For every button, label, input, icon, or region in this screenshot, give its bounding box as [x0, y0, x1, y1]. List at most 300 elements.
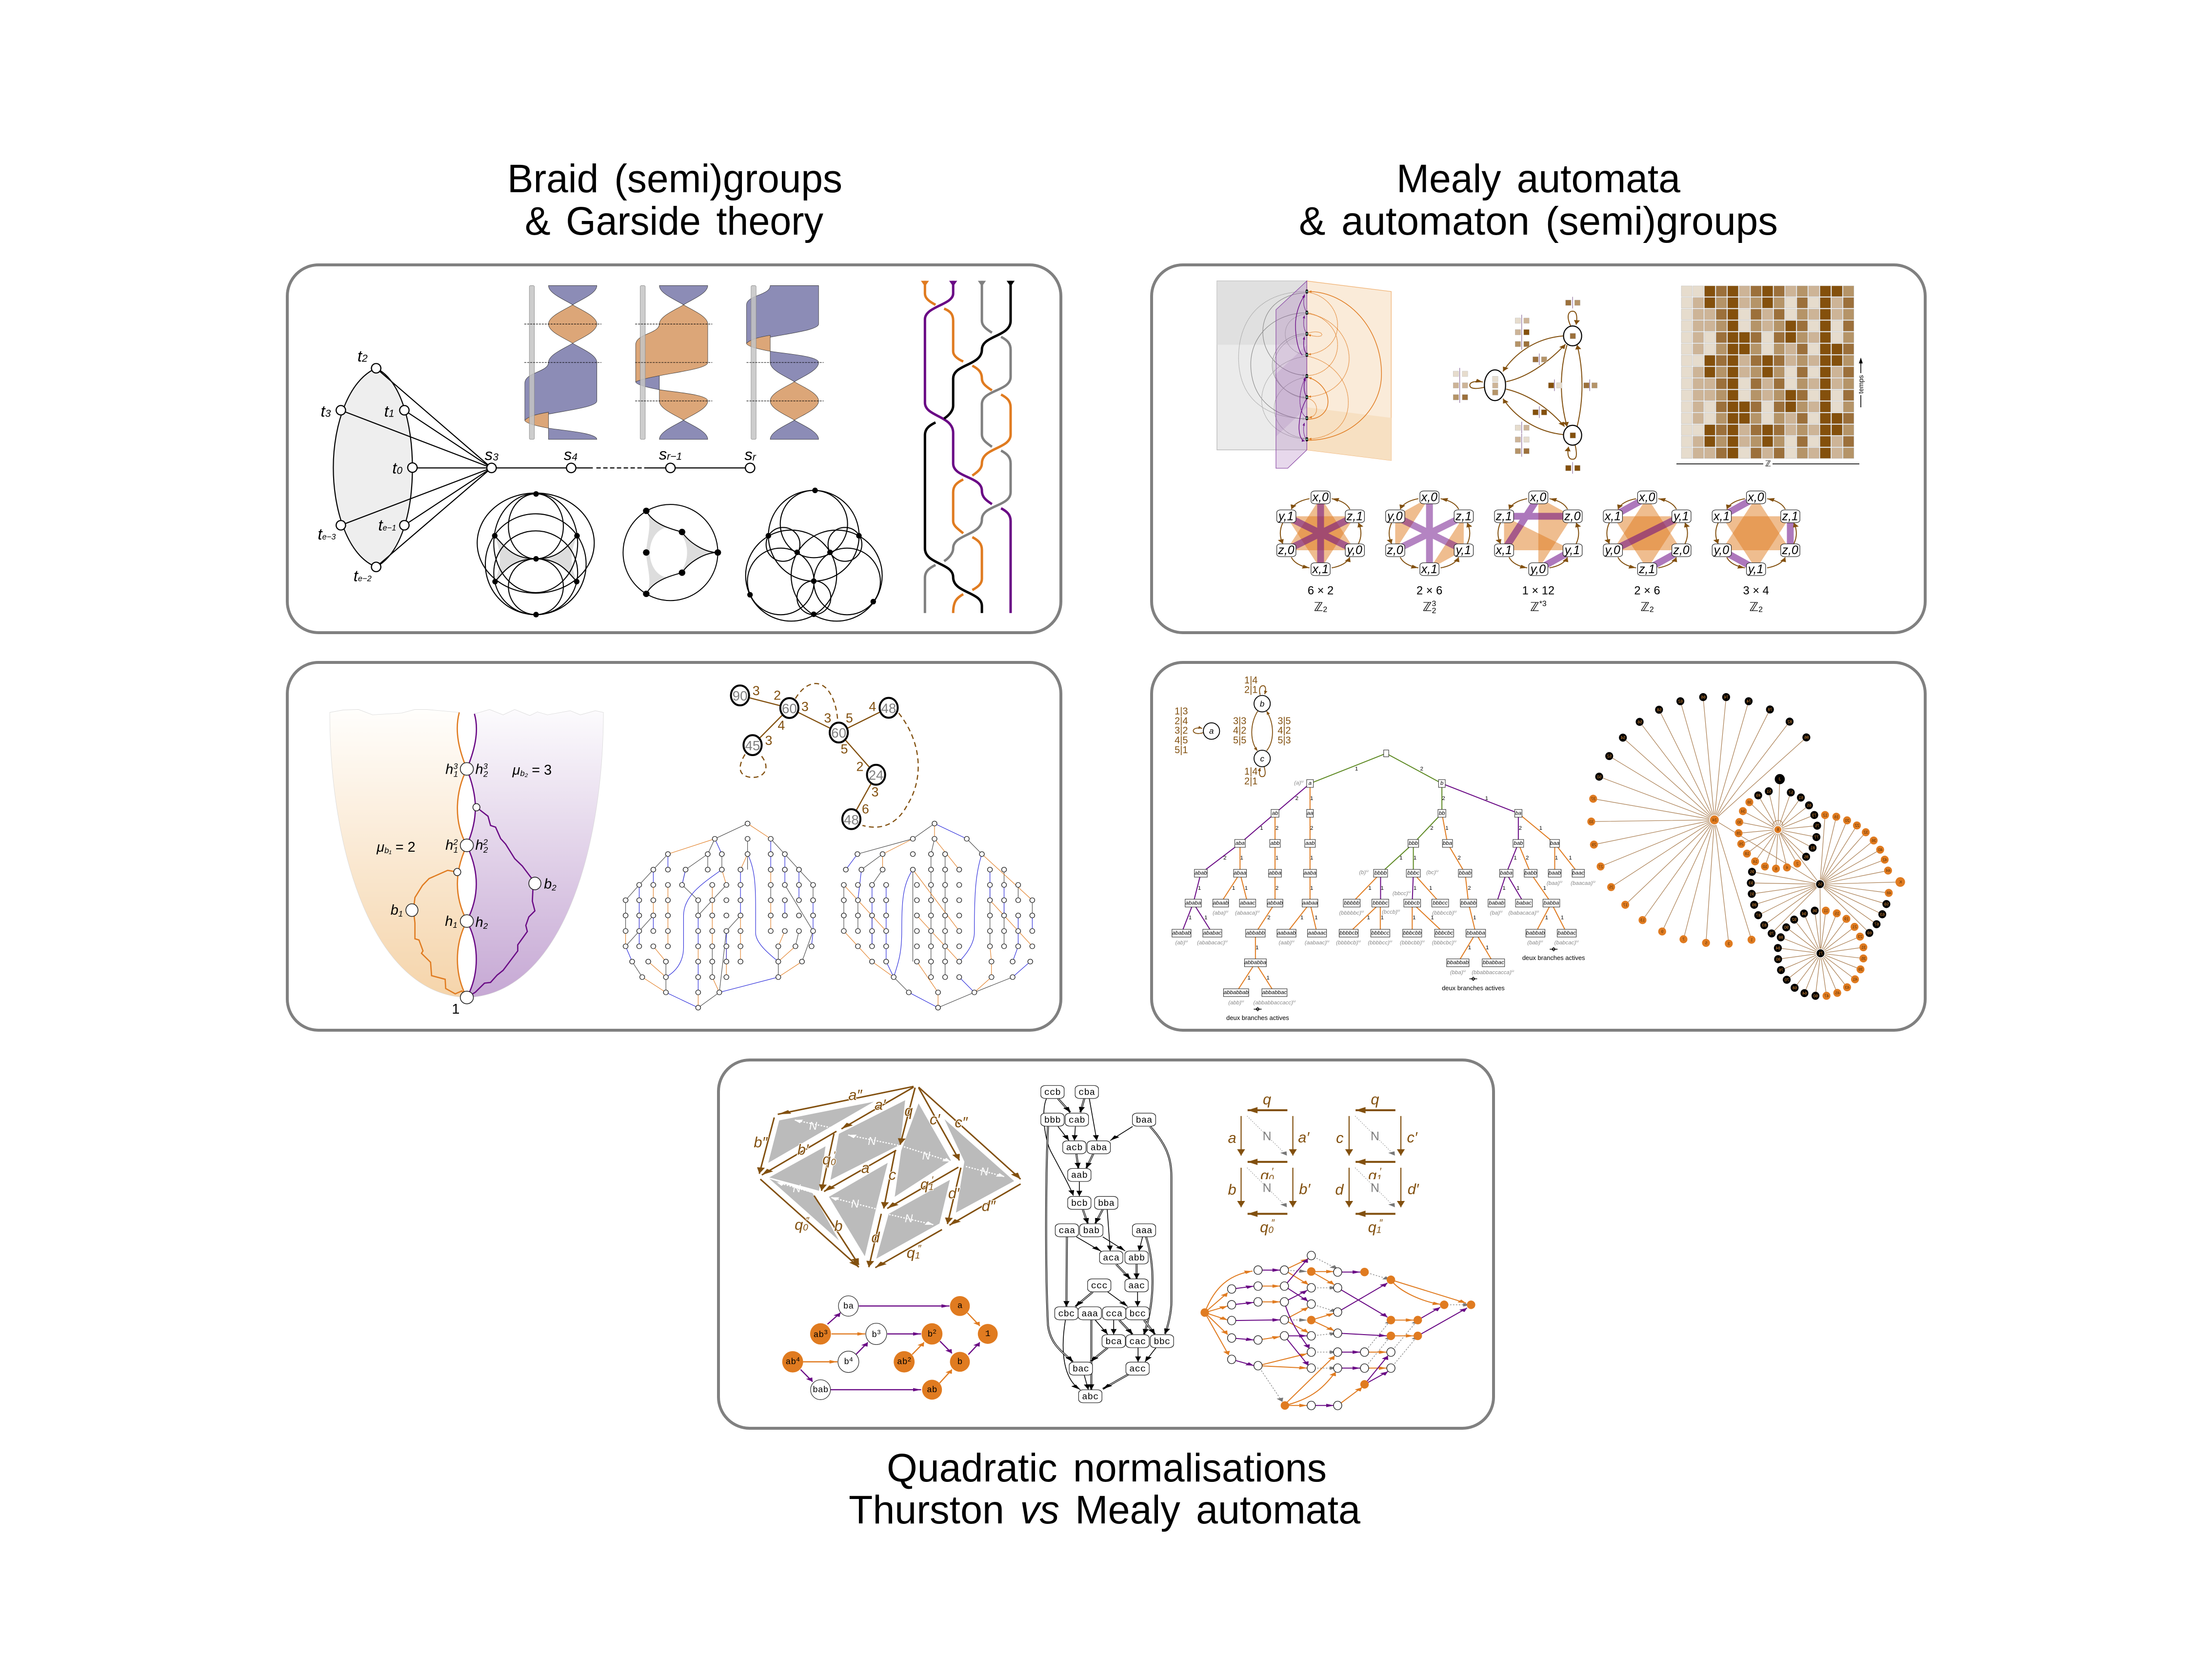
word tree: ω	[1185, 939, 1188, 943]
star graph orbits: 47	[1824, 993, 1829, 998]
word tree: (bbabbaccacca)	[1472, 970, 1512, 976]
shaded parabola with paths: h	[445, 838, 453, 853]
graph of powers of ab: 4	[796, 1356, 800, 1363]
star graph orbits	[1589, 695, 1905, 998]
shaded parabola with paths: 2	[482, 838, 488, 847]
word tree: (bbbbcb)	[1336, 940, 1358, 946]
word graph with rounded nodes	[1044, 1087, 1172, 1402]
hexagonal graph 2: ℤ	[1423, 600, 1432, 614]
word tree: (babacaca)	[1508, 910, 1536, 916]
word tree: deux branches actives	[1442, 984, 1505, 992]
commutative squares: ′	[1379, 1166, 1382, 1177]
domino tiling diagram: d′	[948, 1185, 960, 1202]
hexagonal graph 2: y,0	[1386, 509, 1403, 523]
Coxeter graph with labelled nodes: s	[659, 445, 667, 463]
word tree: ω	[1293, 999, 1296, 1003]
word tree: ababac	[1203, 930, 1222, 936]
word tree: baba	[1500, 870, 1513, 876]
graph of powers of ab: 2	[933, 1328, 937, 1336]
word tree: 1	[1381, 915, 1384, 921]
word tree: abaab	[1213, 900, 1229, 906]
hexagonal graph 4	[1603, 491, 1691, 614]
star graph orbits: 36	[1872, 838, 1876, 843]
word tree: ω	[1257, 910, 1260, 913]
word graph with rounded nodes: cbc	[1058, 1308, 1075, 1319]
word tree: 1	[1310, 885, 1313, 891]
word tree: 1	[1267, 975, 1270, 981]
star graph orbits: 44	[1886, 868, 1891, 873]
title: Mealy automata: Mealy automata	[1396, 157, 1680, 201]
word tree: 1	[1367, 915, 1370, 921]
word tree: babb	[1524, 870, 1537, 876]
word graph with rounded nodes: baa	[1136, 1115, 1152, 1125]
word tree: (bc)	[1426, 870, 1436, 876]
Coxeter graph with labelled nodes: t	[320, 402, 325, 420]
commutative squares: ″	[1379, 1218, 1383, 1229]
shaded parabola with paths: b₂	[520, 768, 528, 778]
word tree: 2	[1295, 796, 1298, 801]
word tree: bbbbcb	[1339, 930, 1358, 936]
tree graph with degree labels: 3	[753, 683, 760, 698]
commutative squares: N	[1371, 1182, 1379, 1195]
star graph orbits: 91	[1750, 891, 1754, 897]
word tree: 1	[1561, 915, 1564, 921]
Coxeter graph with labelled nodes: e−2	[358, 575, 372, 583]
graph of powers of ab: 3	[877, 1329, 881, 1336]
star graph orbits: 83	[1762, 923, 1767, 928]
hexagonal graph 4: y,0	[1604, 543, 1620, 557]
word tree: 1	[1368, 885, 1372, 891]
small automaton a b c: 2|1	[1244, 776, 1257, 787]
commutative squares: q	[1260, 1167, 1269, 1184]
star graph orbits: 49	[1756, 793, 1761, 798]
star graph orbits: 70	[1784, 978, 1789, 982]
graph of powers of ab: b	[957, 1358, 962, 1367]
word graph with rounded nodes: bcc	[1129, 1308, 1146, 1319]
word tree: 2	[1468, 885, 1471, 891]
star graph orbits: 54	[1621, 735, 1625, 740]
tree graph with degree labels: 48	[844, 812, 859, 827]
star graph orbits: 96	[1813, 908, 1817, 913]
word tree: ω	[1225, 939, 1228, 943]
hexagonal graph 4: y,1	[1673, 509, 1689, 523]
word tree: bab	[1514, 840, 1523, 846]
shaded parabola with paths: b₁	[384, 845, 392, 855]
lattice graph right	[844, 823, 1032, 1008]
hexagonal graph 2: x,0	[1421, 491, 1437, 504]
Coxeter graph with labelled nodes: s	[744, 445, 753, 463]
graph of powers of ab: ab	[897, 1358, 908, 1367]
word tree: bb	[1439, 810, 1445, 816]
star graph orbits: 82	[1787, 719, 1792, 724]
word tree: ω	[1327, 939, 1330, 943]
word tree: 2	[1275, 825, 1278, 831]
graph of powers of ab: 1	[985, 1329, 990, 1339]
word tree: 2	[1442, 796, 1445, 801]
hexagonal graph 5: 3 × 4	[1743, 584, 1769, 597]
star graph orbits: 62	[1678, 699, 1683, 704]
shaded parabola with paths: h	[475, 761, 483, 777]
domino tiling diagram: q	[907, 1244, 915, 1261]
word tree: baa	[1550, 840, 1559, 846]
word tree: (bbbcbb)	[1400, 940, 1422, 946]
star graph orbits: 95	[1750, 869, 1754, 874]
star graph orbits: 40	[1878, 847, 1883, 852]
word graph with rounded nodes: ccc	[1091, 1280, 1108, 1291]
layered graph with orange and purple arrows	[1205, 1256, 1471, 1405]
commutative squares	[1228, 1091, 1419, 1236]
star graph orbits: 34	[1741, 809, 1745, 814]
hexagonal graph 3: y,1	[1564, 543, 1580, 557]
word tree: a	[1309, 780, 1312, 786]
small automaton a b c: 1|4	[1244, 675, 1257, 686]
panel: parabola, tree and lattices	[287, 662, 1061, 1030]
commutative squares: a	[1228, 1129, 1236, 1146]
hexagonal graph 1: z,1	[1346, 509, 1363, 523]
hexagonal graph 4: z,1	[1638, 562, 1655, 576]
domino tiling diagram: d″	[982, 1197, 996, 1214]
graph of powers of ab: 4	[849, 1356, 853, 1363]
commutative squares: 0	[1268, 1225, 1274, 1235]
word graph with rounded nodes: ccb	[1044, 1087, 1061, 1098]
word tree: bbb	[1409, 840, 1418, 846]
word tree: 1	[1539, 825, 1542, 831]
star graph orbits: 39	[1858, 967, 1863, 972]
hexagonal graph 4: ℤ	[1640, 600, 1650, 614]
star graph orbits: 84	[1775, 945, 1780, 950]
word tree: aba	[1236, 840, 1245, 846]
word tree: ω	[1576, 939, 1579, 943]
commutative squares: N	[1371, 1130, 1379, 1143]
Coxeter graph with labelled nodes: t	[358, 347, 362, 365]
star graph orbits: 75	[1815, 823, 1819, 828]
title: braid semigroups: Braid (semi)groups	[507, 157, 842, 201]
circle diagram 1	[477, 493, 594, 615]
word tree: (aabaac)	[1305, 940, 1327, 946]
word tree: 1	[1189, 915, 1192, 921]
word tree: bbab	[1459, 870, 1472, 876]
hexagonal graph 1: y,1	[1277, 509, 1294, 523]
word tree: deux branches actives	[1522, 954, 1585, 961]
word tree: abbabb	[1246, 930, 1265, 936]
word tree: abbab	[1267, 900, 1283, 906]
hexagonal graph 5	[1712, 491, 1800, 614]
shaded parabola with paths: 1	[453, 920, 458, 930]
small automaton a b c: 5|3	[1277, 735, 1291, 746]
star graph orbits: 79	[1770, 931, 1774, 936]
word tree: ω	[1454, 910, 1457, 913]
star graph orbits: 52	[1607, 754, 1612, 759]
word tree: aab	[1305, 840, 1315, 846]
star graph orbits: 45	[1835, 990, 1840, 995]
word tree: ω	[1422, 939, 1425, 943]
hexagonal graph 2: z,0	[1386, 543, 1403, 557]
word tree: 2	[1420, 766, 1423, 772]
word tree: (babcac)	[1554, 940, 1576, 946]
word tree: ω	[1593, 880, 1595, 883]
commutative squares: b′	[1299, 1180, 1311, 1198]
tree graph with degree labels: 5	[841, 742, 848, 757]
domino tiling diagram	[754, 1086, 1020, 1268]
word tree: ab	[1272, 810, 1278, 816]
word tree: aaba	[1304, 870, 1316, 876]
commutative squares: 0	[1269, 1173, 1274, 1183]
word tree: 2	[1223, 855, 1226, 861]
word graph with rounded nodes: bba	[1098, 1198, 1115, 1209]
hexagonal graph 2	[1386, 491, 1474, 615]
word tree: ω	[1560, 880, 1563, 883]
star graph orbits: 7	[1682, 937, 1685, 942]
star graph orbits: 61	[1798, 795, 1803, 800]
word graph with rounded nodes: aba	[1091, 1142, 1107, 1153]
Coxeter graph with labelled nodes: t	[378, 516, 383, 534]
graph of powers of ab: b	[844, 1358, 849, 1367]
word tree: 1	[1545, 915, 1548, 921]
word tree: 2	[1267, 915, 1271, 921]
title: braid semigroups: & Garside theory	[525, 199, 823, 243]
shaded parabola with paths: b	[544, 877, 552, 892]
domino tiling diagram: a″	[848, 1086, 862, 1103]
graph of powers of ab: ab	[786, 1358, 796, 1367]
tree graph with degree labels: 3	[765, 733, 772, 748]
shaded parabola with paths: h	[475, 838, 483, 853]
star graph orbits: 76	[1779, 968, 1783, 973]
word tree: 1	[1486, 945, 1489, 951]
star graph orbits: 37	[1591, 796, 1595, 801]
panel: Mealy automata	[1152, 265, 1925, 633]
word tree: 1	[1315, 915, 1318, 921]
word graph with rounded nodes: cac	[1129, 1336, 1146, 1347]
tree graph with degree labels: 24	[869, 768, 884, 783]
panel: tree of words and orbit stars	[1152, 662, 1925, 1030]
shaded parabola with paths: = 3	[528, 762, 552, 778]
graph of powers of ab: b	[928, 1330, 933, 1339]
hexagonal graph 2: y,1	[1455, 543, 1471, 557]
lattice graph left	[626, 823, 813, 1008]
shaded parabola with paths: 1	[399, 909, 403, 918]
hexagonal graph 3: 1 × 12	[1522, 584, 1554, 597]
small automaton a b c: c	[1260, 754, 1264, 763]
star graph orbits: 48	[1887, 890, 1891, 896]
small automaton a b c: 1|4	[1244, 766, 1257, 777]
shaded parabola with paths: = 2	[392, 839, 416, 855]
domino tiling diagram: N	[868, 1135, 876, 1147]
word tree: (bbbbbc)	[1339, 910, 1361, 916]
star graph orbits: 59	[1884, 901, 1889, 906]
hexagonal graph 3: x,0	[1530, 491, 1546, 504]
shaded parabola with paths: h	[445, 761, 453, 777]
star graph orbits: 13	[1640, 918, 1645, 922]
word tree: b	[1440, 780, 1444, 786]
word tree: 1	[1232, 885, 1235, 891]
shaded parabola with paths: h	[476, 915, 483, 930]
Coxeter graph with labelled nodes: r	[753, 451, 757, 462]
graph of powers of ab: ab	[814, 1330, 824, 1340]
word tree: ω	[1241, 999, 1244, 1003]
hexagonal graph 3: *3	[1539, 600, 1547, 608]
star graph orbits: 63	[1880, 912, 1885, 917]
domino tiling diagram: b″	[754, 1134, 768, 1151]
graph of powers of ab: 2	[908, 1356, 911, 1363]
small automaton a b c: 3|2	[1175, 725, 1188, 736]
automaton with square labels	[1453, 297, 1597, 474]
word tree: 1	[1355, 766, 1358, 772]
word tree	[1172, 750, 1595, 1021]
star graph orbits: 32	[1864, 830, 1868, 835]
star graph orbits: 2	[1796, 861, 1798, 866]
word tree: 1	[1414, 855, 1416, 861]
star graph orbits: 11	[1824, 908, 1828, 913]
word tree: ω	[1226, 910, 1229, 913]
word tree: ababa	[1186, 900, 1201, 906]
commutative squares: d	[1335, 1181, 1344, 1198]
word tree: bbbcc	[1433, 900, 1448, 906]
star graph orbits: 31	[1861, 945, 1866, 950]
shaded parabola with paths: 3	[483, 761, 488, 771]
word tree: bbbcb	[1405, 900, 1420, 906]
small automaton a b c: 4|2	[1233, 725, 1246, 736]
star graph orbits: 41	[1853, 977, 1857, 982]
star graph orbits: 87	[1756, 913, 1761, 918]
domino tiling diagram: N	[851, 1197, 859, 1210]
shaded parabola with paths: μ	[513, 762, 520, 778]
word tree: babbac	[1557, 930, 1576, 936]
word tree: bba	[1443, 840, 1452, 846]
word tree: ω	[1397, 909, 1400, 912]
tree graph with degree labels: 2	[857, 759, 863, 774]
word tree: ω	[1463, 969, 1466, 973]
word tree: 2	[1519, 825, 1522, 831]
small automaton a b c: 5|5	[1233, 735, 1246, 746]
word tree: aa	[1307, 810, 1313, 816]
word tree: ω	[1436, 869, 1439, 873]
word tree: 1	[1310, 796, 1313, 801]
word tree: ω	[1536, 910, 1539, 913]
star graph orbits: 30	[1737, 820, 1742, 824]
tree graph with degree labels: 4	[777, 718, 785, 733]
word tree: 1	[1555, 855, 1558, 861]
star graph orbits: 89	[1752, 902, 1756, 907]
star graph orbits: 42	[1882, 857, 1887, 862]
word tree: 1	[1413, 915, 1416, 921]
word tree: babbab	[1526, 930, 1545, 936]
hexagonal graph 5: y,0	[1713, 543, 1729, 557]
word tree: 1	[1381, 885, 1384, 891]
word tree: bbbc	[1407, 870, 1419, 876]
commutative squares: N	[1263, 1182, 1272, 1195]
tree graph with degree labels: 4	[869, 699, 876, 714]
word tree: 1	[1255, 945, 1258, 951]
Coxeter graph with labelled nodes: t	[354, 566, 358, 584]
hexagonal graph 3: y,0	[1530, 562, 1546, 576]
word tree: abaac	[1240, 900, 1255, 906]
ribbon diagrams	[524, 285, 824, 440]
word tree: aabaa	[1302, 900, 1318, 906]
heat map axes	[1676, 358, 1865, 468]
word tree: abba	[1269, 870, 1281, 876]
star graph orbits: 71	[1818, 951, 1823, 956]
word tree: 1	[1198, 885, 1201, 891]
star graph orbits: 8	[1777, 827, 1779, 832]
star graph orbits: 21	[1852, 924, 1857, 929]
graph of powers of ab: ab	[927, 1385, 937, 1395]
word graph with rounded nodes: bca	[1105, 1336, 1122, 1347]
word tree: deux branches actives	[1226, 1014, 1289, 1021]
tree graph with degree labels: 6	[862, 801, 869, 816]
tree graph with degree labels	[731, 683, 918, 829]
word graph with rounded nodes: abc	[1082, 1391, 1098, 1402]
word tree: bbabb	[1461, 900, 1476, 906]
Coxeter graph with labelled nodes: 3	[493, 451, 498, 462]
hexagonal graph 1: y,0	[1346, 543, 1362, 557]
small automaton a b c: 4|2	[1277, 725, 1291, 736]
word tree: (bbcc)	[1393, 891, 1408, 897]
word tree: (abb)	[1228, 1000, 1241, 1006]
hexagonal graph 1: 6 × 2	[1308, 584, 1334, 597]
star graph orbits: 10	[1763, 864, 1767, 869]
word tree: 1	[1502, 885, 1506, 891]
word tree: 1	[1240, 855, 1243, 861]
hexagonal graph 4: x,1	[1604, 509, 1621, 523]
commutative squares: ′	[1272, 1166, 1274, 1177]
hexagonal graph 2: x,1	[1421, 562, 1437, 576]
small automaton a b c: 1|3	[1175, 706, 1188, 717]
word tree: 1	[1414, 885, 1416, 891]
word graph with rounded nodes: caa	[1058, 1225, 1075, 1236]
star graph orbits: 29	[1592, 842, 1596, 847]
word tree: ω	[1301, 780, 1304, 783]
star graph orbits: 9	[1661, 929, 1663, 934]
Coxeter graph with labelled nodes	[318, 347, 757, 584]
tree graph with degree labels: 48	[881, 700, 896, 716]
commutative squares: d′	[1408, 1180, 1419, 1198]
star graph orbits: 85	[1804, 854, 1809, 859]
star graph orbits: 68	[1793, 985, 1797, 990]
word tree: (bbbcbc)	[1432, 940, 1454, 946]
commutative squares: c	[1336, 1129, 1344, 1146]
word tree: (baa)	[1547, 880, 1560, 886]
star graph orbits: 19	[1844, 917, 1849, 921]
star graph orbits: 56	[1637, 720, 1642, 724]
shaded parabola with paths: μ	[377, 839, 384, 855]
word graph with rounded nodes: bab	[1083, 1225, 1099, 1236]
star graph orbits: 6	[1775, 866, 1777, 871]
word graph with rounded nodes: aac	[1128, 1280, 1145, 1291]
shaded parabola with paths: 2	[483, 845, 488, 854]
hexagonal graph 4: 2 × 6	[1634, 584, 1660, 597]
star graph orbits: 12	[1823, 813, 1828, 818]
word tree: baac	[1572, 870, 1584, 876]
commutative squares: q	[1263, 1091, 1271, 1108]
star graph orbits: 26	[1739, 841, 1744, 846]
domino tiling diagram: b′	[797, 1141, 809, 1158]
word tree: (aba)	[1213, 910, 1226, 916]
word graph with rounded nodes: acc	[1129, 1364, 1146, 1375]
tree graph with degree labels: 5	[846, 711, 853, 725]
word tree: abaa	[1234, 870, 1246, 876]
hexagonal graph 2: 3	[1432, 600, 1436, 608]
hexagonal graph 5: x,1	[1713, 509, 1730, 523]
star graph orbits: 94	[1802, 911, 1806, 916]
domino tiling diagram: ′	[931, 1175, 934, 1186]
star graph orbits: 60	[1813, 993, 1818, 998]
word tree: (aab)	[1279, 940, 1292, 946]
word graph with rounded nodes: aab	[1071, 1170, 1088, 1181]
star graph orbits: 50	[1597, 774, 1602, 779]
word tree: bbabba	[1467, 930, 1485, 936]
domino tiling diagram: N	[809, 1119, 817, 1132]
word tree: 1	[1300, 915, 1303, 921]
